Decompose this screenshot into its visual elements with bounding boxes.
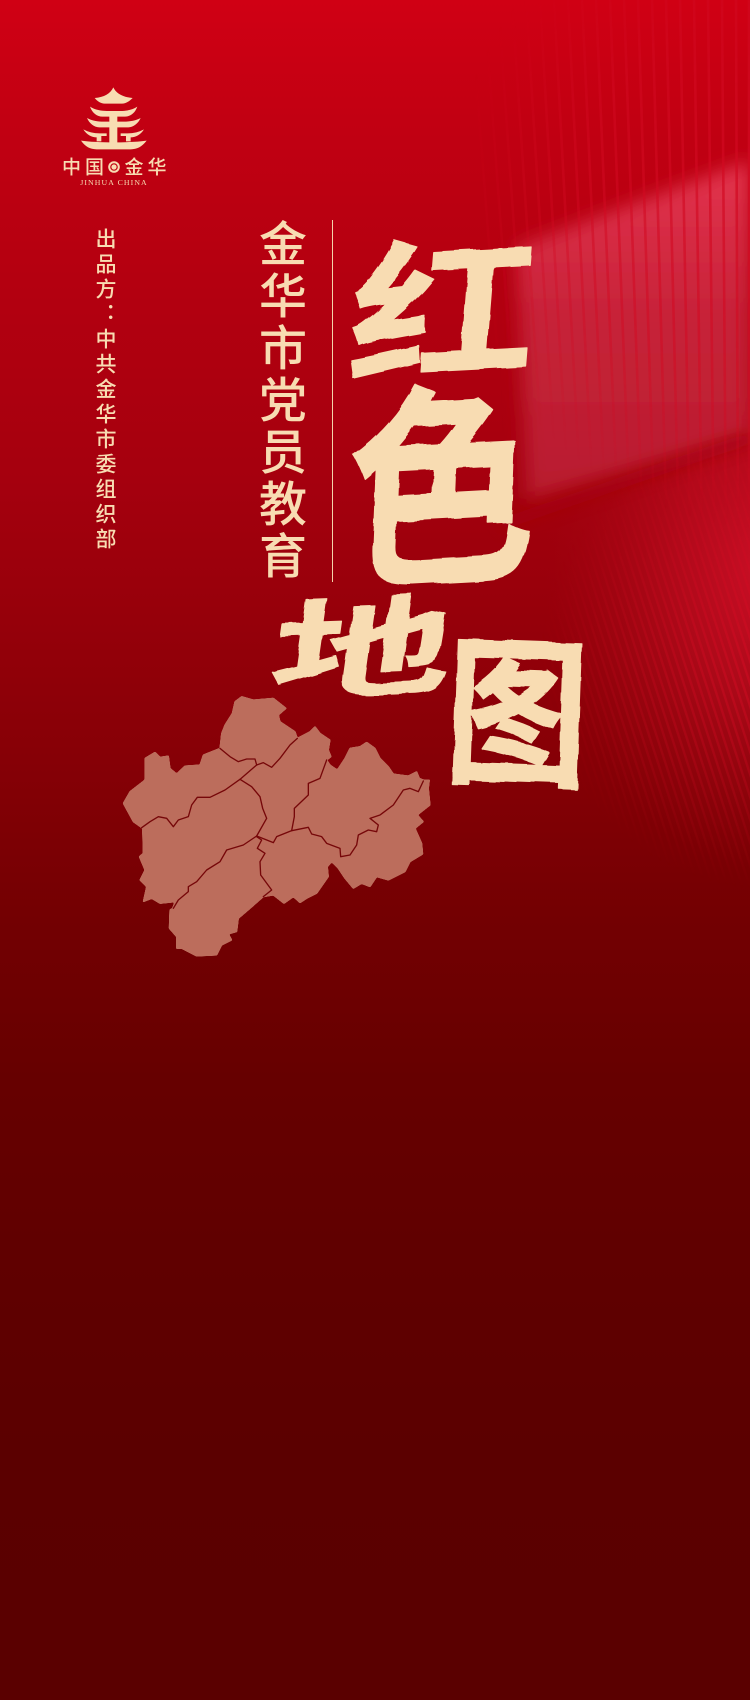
- icon: tower emblem: [81, 87, 147, 149]
- background light bands and stripes: [510, 62, 750, 856]
- map of Jinhua districts: [122, 696, 430, 956]
- title glyph: hong: 红: [341, 189, 546, 415]
- logo text: China Jinhua: [62, 156, 166, 178]
- logo: Jinhua China: [62, 88, 166, 187]
- icon: round seal: [108, 161, 120, 173]
- map outline fill: [123, 697, 430, 956]
- title glyph: tu: 图: [441, 583, 593, 823]
- district borders: [142, 738, 423, 908]
- main title: red map: [262, 189, 593, 823]
- logo subtitle: JINHUA CHINA: [80, 178, 148, 187]
- subtitle column: 金华市党员教育: [251, 219, 304, 583]
- publisher text column: 出品方：中共金华市委组织部: [93, 228, 116, 553]
- logo text: China Jinhua: 中国: [62, 156, 104, 178]
- title glyph: di: 地: [262, 560, 466, 723]
- logo text: China Jinhua: 金华: [124, 156, 166, 178]
- title glyph: se: 色: [341, 314, 544, 634]
- divider line: [332, 220, 333, 582]
